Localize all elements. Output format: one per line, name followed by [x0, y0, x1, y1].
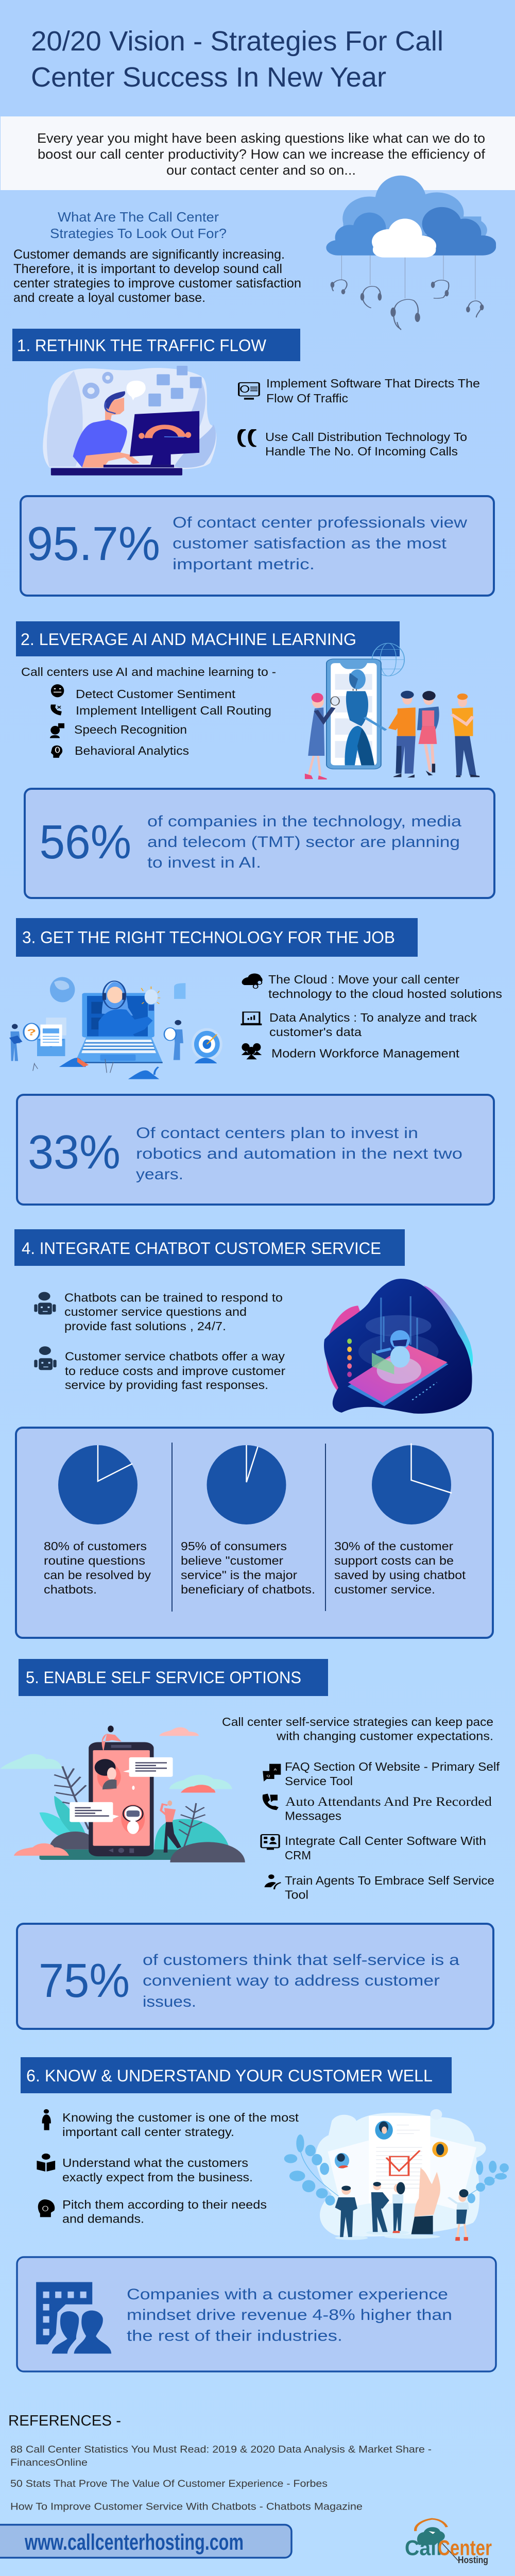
- panel: section 3 right technology: [9, 918, 502, 1205]
- text: knowing the customer: [62, 2111, 299, 2139]
- chart: 30% pie: customer service.: [334, 1583, 435, 1596]
- text: chatbots trained: customer service questions and: [64, 1305, 247, 1318]
- text: knowing the customer: Knowing the customer is one of the most: [62, 2111, 299, 2124]
- illustration: agent in laptop: ?: [27, 1027, 36, 1038]
- footer: website url: www.callcenterhosting.com: [24, 2530, 244, 2555]
- callout: companies revenue: [17, 2257, 496, 2371]
- callout: companies revenue: the rest of their industries.: [127, 2328, 342, 2344]
- heading: section 2: 2. LEVERAGE AI AND MACHINE LEARNING: [21, 630, 356, 649]
- text block: customer demands: and create a loyal customer base.: [13, 291, 205, 305]
- text: the cloud: [268, 973, 502, 1001]
- text: implement software: Flow Of Traffic: [266, 392, 348, 405]
- chart: 30% pie: saved by using chatbot: [334, 1568, 466, 1582]
- heading: section 5: 5. ENABLE SELF SERVICE OPTIONS: [26, 1668, 301, 1687]
- text: chatbots reduce costs: to reduce costs and improve customer: [65, 1364, 285, 1378]
- chart: 30% pie: support costs can be: [334, 1554, 454, 1567]
- chart: 30% pie: [334, 1444, 466, 1596]
- text: chatbots reduce costs: [65, 1350, 285, 1392]
- text: chatbots trained: provide fast solutions , 24/7.: [64, 1319, 226, 1333]
- callout: 75%: 75%: [39, 1954, 130, 2007]
- logo: Call Center Hosting: Center: [438, 2536, 492, 2560]
- text: FAQ: [285, 1760, 500, 1788]
- heading: section 6: 6. KNOW & UNDERSTAND YOUR CUSTOMER WELL: [26, 2066, 433, 2085]
- text: call distribution: [265, 430, 467, 458]
- illustration: agent at monitor: [43, 366, 216, 476]
- callout: 95.7%: 95.7%: [27, 517, 160, 570]
- icon: face: [51, 684, 64, 697]
- illustration: chatbot on phone: [324, 1279, 473, 1414]
- icon: laptop chart: [241, 1012, 262, 1025]
- heading: section 3: [16, 918, 418, 957]
- icon: routing phone: [50, 705, 62, 716]
- text: implement software: [266, 377, 480, 405]
- icon: robot two: [34, 1346, 57, 1370]
- panel: section 5 self service: [0, 1659, 500, 2029]
- icon: speech: [50, 723, 64, 738]
- text: auto attendants: Messages: [285, 1809, 341, 1823]
- text: FAQ: FAQ Section Of Website - Primary Self: [285, 1760, 500, 1773]
- icon: cloud link: [242, 974, 263, 989]
- icon: cloud with headsets: [326, 176, 496, 330]
- text: pitch: Pitch them according to their needs: [62, 2198, 267, 2211]
- text block: reference list: How To Improve Customer Service With Chatbots - Chatbots Magazine: [10, 2501, 363, 2512]
- chart: 80% pie: routine questions: [44, 1554, 145, 1567]
- text block: reference list: [10, 2444, 432, 2512]
- heading: what are the strategies: [50, 209, 227, 241]
- text block: customer demands: Therefore, it is important to develop sound call: [13, 262, 282, 276]
- text: train agents: Tool: [285, 1888, 308, 1901]
- callout: companies revenue: mindset drive revenue 4-8% higher than: [127, 2307, 452, 2324]
- illustration: agent in laptop: [9, 977, 222, 1079]
- callout: 56%: to invest in AI.: [147, 854, 261, 871]
- text block: customer demands: [13, 247, 301, 305]
- icon: phone message: [263, 1794, 279, 1810]
- text: the cloud: The Cloud : Move your call center: [268, 973, 459, 986]
- text: train agents: [285, 1874, 494, 1901]
- heading: section 4: [14, 1229, 405, 1266]
- icon: FAQ bubbles: A: [273, 1768, 277, 1771]
- panel: references: [8, 2413, 432, 2512]
- callout: 56%: [25, 789, 494, 898]
- chart: 80% pie: chatbots.: [44, 1583, 97, 1596]
- heading: section 5: [19, 1659, 328, 1696]
- illustration: robot in phone with people: [305, 643, 479, 779]
- callout: 56%: and telecom (TMT) sector are planning: [147, 834, 460, 851]
- text block: reference list: 88 Call Center Statistics You Must Read: 2019 & 2020 Data Analysis & Market Share -: [10, 2444, 432, 2455]
- heading: references: REFERENCES -: [8, 2413, 121, 2429]
- chart: 80% pie: can be resolved by: [44, 1568, 151, 1582]
- panel: intro band: boost our call center productivity? How can we increase the efficiency of: [38, 146, 486, 162]
- heading: section 1: 1. RETHINK THE TRAFFIC FLOW: [17, 336, 267, 354]
- text: call centers use AI: Call centers use AI and machine learning to -: [21, 665, 276, 679]
- callout: 33%: [17, 1095, 494, 1205]
- panel: intro band: Every year you might have been asking questions like what can we do to: [37, 130, 485, 146]
- text: understand: exactly expect from the business.: [62, 2171, 253, 2184]
- panel: section 2 leverage AI: [16, 621, 494, 898]
- text: integrate CRM: Integrate Call Center Software With: [285, 1834, 486, 1848]
- chart: 95% pie: believe "customer: [181, 1554, 283, 1567]
- text: auto attendants: [285, 1795, 492, 1823]
- text: call routing: Implement Intelligent Call Routing: [76, 704, 271, 717]
- icon: reader with book: [37, 2154, 55, 2172]
- icon: robot one: [34, 1292, 56, 1315]
- logo: Call Center Hosting: Call: [405, 2536, 442, 2560]
- callout: 33%: years.: [136, 1166, 183, 1183]
- icon: phone handsets: [238, 430, 256, 446]
- icon: building and people: [36, 2282, 111, 2353]
- chart: 95% pie: beneficiary of chatbots.: [181, 1583, 315, 1596]
- text: chatbots trained: Chatbots can be trained to respond to: [64, 1291, 283, 1304]
- icon: workforce people: [242, 1043, 262, 1059]
- chart: 95% pie: [181, 1445, 315, 1596]
- text: call distribution: Handle The No. Of Incoming Calls: [265, 445, 458, 458]
- text: understand: [62, 2156, 253, 2184]
- callout: 95.7%: [21, 496, 494, 596]
- heading: section 1: [12, 329, 300, 361]
- heading: section 6: [21, 2057, 452, 2093]
- text: train agents: Train Agents To Embrace Self Service: [285, 1874, 494, 1887]
- footer: website url: [0, 2524, 291, 2557]
- title: Center Success In New Year: [31, 62, 386, 93]
- callout: 75%: issues.: [143, 1993, 196, 2010]
- text: FAQ: Service Tool: [285, 1774, 353, 1788]
- icon: person: [42, 2109, 51, 2130]
- text: data analytics: [269, 1011, 477, 1039]
- callout: 75%: of customers think that self-service is a: [143, 1952, 459, 1969]
- heading: section 3: 3. GET THE RIGHT TECHNOLOGY FOR THE JOB: [22, 928, 395, 947]
- heading: section 4: 4. INTEGRATE CHATBOT CUSTOMER SERVICE: [22, 1239, 381, 1258]
- icon: agent: [264, 1874, 281, 1889]
- heading: section 2: [16, 621, 400, 656]
- text: understand: Understand what the customers: [62, 2156, 248, 2170]
- icon: FAQ bubbles: [263, 1764, 281, 1782]
- heading: what are the strategies: What Are The Call Center: [58, 209, 219, 225]
- callout: companies revenue: Companies with a customer experience: [127, 2286, 448, 2303]
- callout: 75%: convenient way to address customer: [143, 1972, 440, 1989]
- text: speech recognition: Speech Recognition: [74, 723, 187, 736]
- text: self-service intro: [222, 1715, 493, 1742]
- panel: intro band: [1, 116, 515, 190]
- icon: FAQ bubbles: Q: [267, 1774, 270, 1777]
- text: knowing the customer: important call center strategy.: [62, 2125, 234, 2139]
- chart: 95% pie: service" is the major: [181, 1568, 297, 1582]
- logo: Call Center Hosting: [405, 2519, 492, 2565]
- icon: monitor chart: [239, 383, 259, 400]
- text: detect sentiment: Detect Customer Sentiment: [76, 687, 235, 701]
- callout: 33%: robotics and automation in the next two: [136, 1145, 462, 1162]
- callout: 95.7%: Of contact center professionals view: [173, 514, 467, 531]
- text block: customer demands: Customer demands are significantly increasing.: [13, 247, 285, 262]
- icon: head with headset: [38, 2199, 55, 2217]
- text: integrate CRM: CRM: [285, 1849, 311, 1862]
- text: integrate CRM: [285, 1834, 486, 1862]
- text: chatbots reduce costs: service by providing fast responses.: [65, 1378, 268, 1392]
- heading: what are the strategies: Strategies To Look Out For?: [50, 226, 227, 241]
- text: self-service intro: with changing customer expectations.: [276, 1729, 493, 1742]
- callout: 56%: of companies in the technology, media: [147, 813, 461, 830]
- callout: 75%: [17, 1924, 493, 2029]
- text: chatbots reduce costs: Customer service chatbots offer a way: [65, 1350, 285, 1363]
- text: workforce management: Modern Workforce Management: [271, 1047, 459, 1060]
- panel: section 1 rethink the traffic flow: [12, 329, 494, 596]
- title: 20/20 Vision - Strategies For Call: [31, 26, 443, 57]
- callout: 56%: 56%: [39, 815, 131, 869]
- callout: 95.7%: customer satisfaction as the most: [173, 535, 447, 552]
- panel: intro band: our contact center and so on...: [166, 162, 356, 178]
- chart: 30% pie: 30% of the customer: [334, 1539, 453, 1553]
- logo: Call Center Hosting: Hosting: [458, 2555, 488, 2565]
- panel: pie chart stats: [16, 1428, 493, 1638]
- illustration: resumes and team: [284, 2109, 509, 2241]
- text: self-service intro: Call center self-service strategies can keep pace: [222, 1715, 493, 1728]
- text block: customer demands: center strategies to improve customer satisfaction: [13, 276, 301, 291]
- text: call distribution: Use Call Distribution Technology To: [265, 430, 467, 444]
- chart: 80% pie: 80% of customers: [44, 1539, 147, 1553]
- text: data analytics: customer's data: [269, 1025, 362, 1039]
- text: implement software: Implement Software That Directs The: [266, 377, 480, 390]
- text block: reference list: FinancesOnline: [10, 2457, 88, 2468]
- text: behavioral analytics: Behavioral Analytics: [75, 744, 189, 757]
- icon: CRM screen: [261, 1835, 279, 1850]
- text block: reference list: 50 Stats That Prove The Value Of Customer Experience - Forbes: [10, 2478, 328, 2489]
- callout: 33%: 33%: [28, 1125, 121, 1179]
- chart: 95% pie: 95% of consumers: [181, 1539, 287, 1553]
- callout: 33%: Of contact centers plan to invest in: [136, 1125, 418, 1142]
- panel: section 6 know your customer: [17, 2057, 509, 2371]
- text: chatbots trained: [64, 1291, 283, 1333]
- text: pitch: and demands.: [62, 2212, 144, 2226]
- illustration: phone chat: [0, 1725, 245, 1862]
- text: the cloud: technology to the cloud hosted solutions: [268, 987, 502, 1001]
- panel: section 4 chatbot: [14, 1229, 493, 1638]
- chart: 80% pie: [44, 1445, 151, 1596]
- text: data analytics: Data Analytics : To analyze and track: [269, 1011, 477, 1024]
- text: auto attendants: Auto Attendants And Pre Recorded: [285, 1795, 492, 1809]
- title: [31, 26, 443, 93]
- text: pitch: [62, 2198, 267, 2226]
- callout: 95.7%: important metric.: [173, 556, 315, 573]
- icon: head: [51, 745, 62, 758]
